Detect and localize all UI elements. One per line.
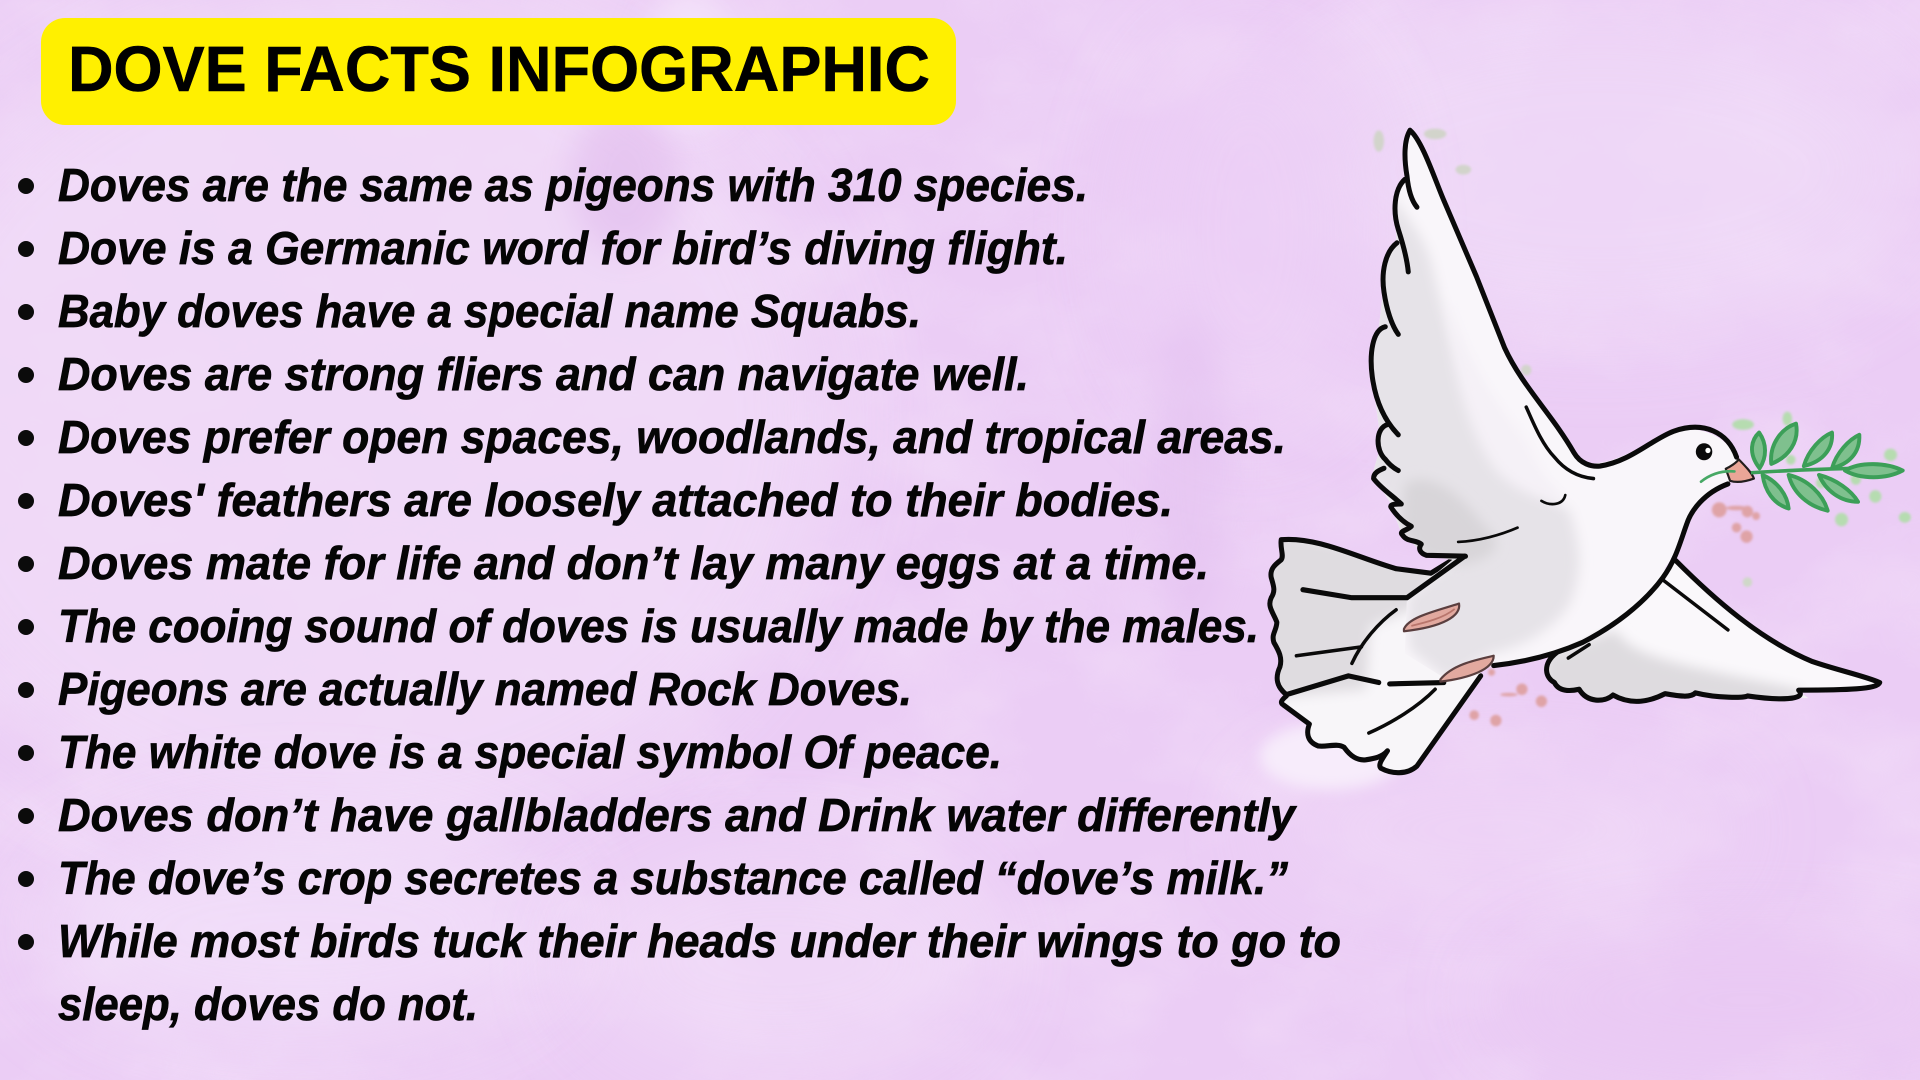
fact 13: While most birds tuck their heads under their wings to go to (58, 915, 1341, 967)
olive branch (1751, 424, 1903, 511)
fact 1: Doves are the same as pigeons with 310 species. (58, 159, 1088, 211)
title banner (41, 18, 956, 125)
fact 11: Doves don’t have gallbladders and Drink water differently (58, 789, 1297, 841)
tail feathers (1266, 529, 1483, 774)
lower wing (1544, 560, 1880, 707)
fact list (18, 159, 1341, 1030)
fact 5: Doves prefer open spaces, woodlands, and tropical areas. (58, 411, 1286, 463)
fact 4: Doves are strong fliers and can navigate well. (58, 348, 1029, 400)
fact 3: Baby doves have a special name Squabs. (58, 285, 921, 337)
fact 10: The white dove is a special symbol Of peace. (58, 726, 1002, 778)
wing shading (1361, 196, 1579, 680)
title banner: DOVE FACTS INFOGRAPHIC (68, 33, 930, 105)
fact 6: Doves' feathers are loosely attached to their bodies. (58, 474, 1173, 526)
fact 13 (18, 915, 1341, 1030)
fact 7: Doves mate for life and don’t lay many eggs at a time. (58, 537, 1209, 589)
feet (1404, 604, 1494, 682)
fact 13: sleep, doves do not. (58, 978, 478, 1030)
feather lines (1526, 407, 1593, 479)
fact 8: The cooing sound of doves is usually made by the males. (58, 600, 1259, 652)
body and raised wing (1296, 130, 1754, 733)
paint splatter (1374, 129, 1911, 726)
fact 2: Dove is a Germanic word for bird’s diving flight. (58, 222, 1068, 274)
illustration: white dove with olive branch (1260, 129, 1911, 790)
paint wash under tail (1260, 723, 1403, 790)
fact 12: The dove’s crop secretes a substance called “dove’s milk.” (58, 852, 1288, 904)
head: eye and beak (1696, 443, 1754, 482)
fact 9: Pigeons are actually named Rock Doves. (58, 663, 912, 715)
